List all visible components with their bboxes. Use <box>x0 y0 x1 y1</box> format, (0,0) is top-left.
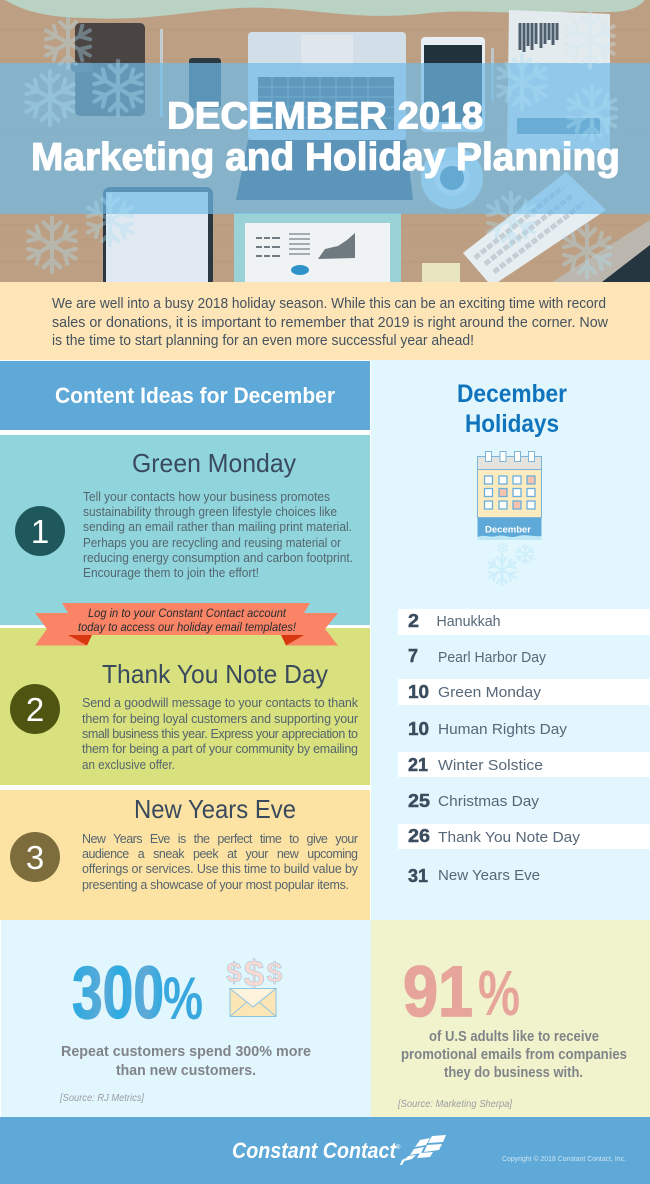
stat: 300 percent: than new customers. <box>116 1062 256 1079</box>
logo wordmark: Constant Contact <box>232 1138 397 1163</box>
panel: Thank You Note Day <box>0 628 370 785</box>
copyright: Copyright © 2018 Constant Contact, Inc. <box>502 1154 626 1163</box>
panel: New Years Eve: audience a sneak peek at your new upcoming <box>82 847 358 861</box>
holiday list: 25 <box>408 790 430 811</box>
panel: Thank You Note Day: Send a goodwill message to your contacts to thank <box>82 696 359 710</box>
holiday list: Winter Solstice <box>438 758 543 774</box>
number 1: 1 <box>31 513 49 550</box>
number 2: 2 <box>26 691 44 728</box>
holiday list: Green Monday <box>438 685 542 701</box>
panel: New Years Eve: presenting a showcase of your most popular items. <box>82 878 349 892</box>
callout ribbon: today to access our holiday email templates! <box>78 620 297 634</box>
holiday list: 31 <box>408 865 428 886</box>
wireless keyboard <box>463 172 606 282</box>
holiday list: Christmas Day <box>438 794 540 810</box>
holiday list: New Years Eve <box>438 868 540 884</box>
panel: Thank You Note Day: Thank You Note Day <box>102 659 328 689</box>
stat: 91 percent: they do business with. <box>444 1064 583 1081</box>
icon: calendar <box>478 452 542 540</box>
panel: Green Monday: sending an email rather than mailing print material. <box>83 520 352 534</box>
smartphone <box>421 37 485 132</box>
panel: Green Monday: Perhaps you are recycling and reusing material or <box>83 536 341 550</box>
tablet <box>103 187 213 287</box>
stat: 91 percent: % <box>478 957 520 1029</box>
panel: Green Monday <box>0 435 370 625</box>
icon: envelope with dollars: $ <box>226 957 242 988</box>
stat: 91 percent: of U.S adults like to receive <box>429 1028 599 1045</box>
notebook <box>71 23 145 116</box>
holiday list: 7 <box>408 645 418 666</box>
panel: Green Monday: Green Monday <box>132 448 296 478</box>
sticky notes <box>422 263 460 282</box>
heading <box>457 380 567 438</box>
holiday list: 2 <box>408 610 419 631</box>
panel: Thank You Note Day: small business this year. Express your appreciation to <box>82 727 358 741</box>
logo mark <box>400 1135 446 1165</box>
heading: Holidays <box>465 410 559 438</box>
callout ribbon: Log in to your Constant Contact account <box>88 606 287 620</box>
number 3 <box>10 832 60 882</box>
number 3: 3 <box>26 839 44 876</box>
holiday list: Thank You Note Day <box>438 830 581 846</box>
heading: December <box>457 380 567 408</box>
title: DECEMBER 2018 <box>167 96 483 138</box>
panel: Thank You Note Day: them for being loyal customers and supporting your <box>82 712 358 726</box>
panel: December holidays <box>371 360 650 920</box>
intro panel <box>0 282 650 360</box>
stat: 91 percent: 91 <box>403 953 473 1032</box>
intro panel: sales or donations, it is important to remember that 2019 is right around the corner. Now <box>52 315 609 331</box>
icon: snowflakes <box>486 543 535 585</box>
holiday list: Human Rights Day <box>438 722 568 738</box>
content ideas header <box>0 361 370 430</box>
printed report <box>234 213 401 282</box>
paper with charts <box>507 10 610 150</box>
panel: Thank You Note Day: them for being a part of your community by emailing <box>82 742 358 756</box>
footer <box>0 1117 650 1184</box>
icon: calendar: December <box>485 524 532 534</box>
content ideas header: Content Ideas for December <box>55 383 335 408</box>
coffee cup <box>421 147 483 209</box>
panel: Green Monday: Tell your contacts how your business promotes <box>83 490 330 504</box>
intro panel: is the time to start planning for an even more successful year ahead! <box>52 333 474 349</box>
monitor corner <box>552 220 650 282</box>
holiday list: 10 <box>408 681 429 702</box>
snowflakes <box>22 13 620 277</box>
stat: 300 percent <box>1 920 371 1117</box>
panel: New Years Eve: New Years Eve <box>134 794 296 824</box>
laptop <box>236 32 413 200</box>
icon: envelope with dollars: $ <box>267 957 283 988</box>
holiday list: Pearl Harbor Day <box>438 650 547 666</box>
stat: 300 percent: Repeat customers spend 300% more <box>61 1043 311 1060</box>
stat: 91 percent <box>371 920 650 1117</box>
icon: envelope with dollars: $ <box>244 953 265 994</box>
panel: New Years Eve: offerings or services. Use this time to build value by <box>82 862 359 876</box>
holiday list: 10 <box>408 718 429 739</box>
stat: 300 percent: [Source: RJ Metrics] <box>59 1092 145 1104</box>
panel: New Years Eve: New Years Eve is the perfect time to give your <box>82 832 358 846</box>
holiday list: 26 <box>408 825 430 846</box>
holiday list: 21 <box>408 754 428 775</box>
title <box>31 96 620 179</box>
stat: 300 percent: % <box>163 965 203 1032</box>
holiday list <box>398 609 650 886</box>
callout ribbon <box>35 603 338 646</box>
panel: New Years Eve <box>0 790 370 920</box>
blue title band <box>0 63 650 214</box>
holiday list: Hanukkah <box>436 614 500 630</box>
icon: envelope with dollars <box>226 953 283 1016</box>
panel: Green Monday: sustainability through green lifestyle choices like <box>83 505 337 519</box>
panel: Green Monday: Encourage them to join the effort! <box>83 566 259 580</box>
footer: ® <box>396 1144 401 1151</box>
hero photo banner <box>0 0 650 287</box>
number 1 <box>15 506 65 556</box>
intro panel: We are well into a busy 2018 holiday season. While this can be an exciting time with record <box>52 296 606 312</box>
stat: 91 percent: [Source: Marketing Sherpa] <box>397 1098 513 1110</box>
number 2 <box>10 684 60 734</box>
phone <box>189 58 221 108</box>
title: Marketing and Holiday Planning <box>31 136 620 179</box>
panel: Green Monday: reducing energy consumption and carbon footprint. <box>83 551 353 565</box>
stat: 300 percent: 300 <box>72 951 164 1034</box>
panel: Thank You Note Day: an exclusive offer. <box>82 758 175 772</box>
